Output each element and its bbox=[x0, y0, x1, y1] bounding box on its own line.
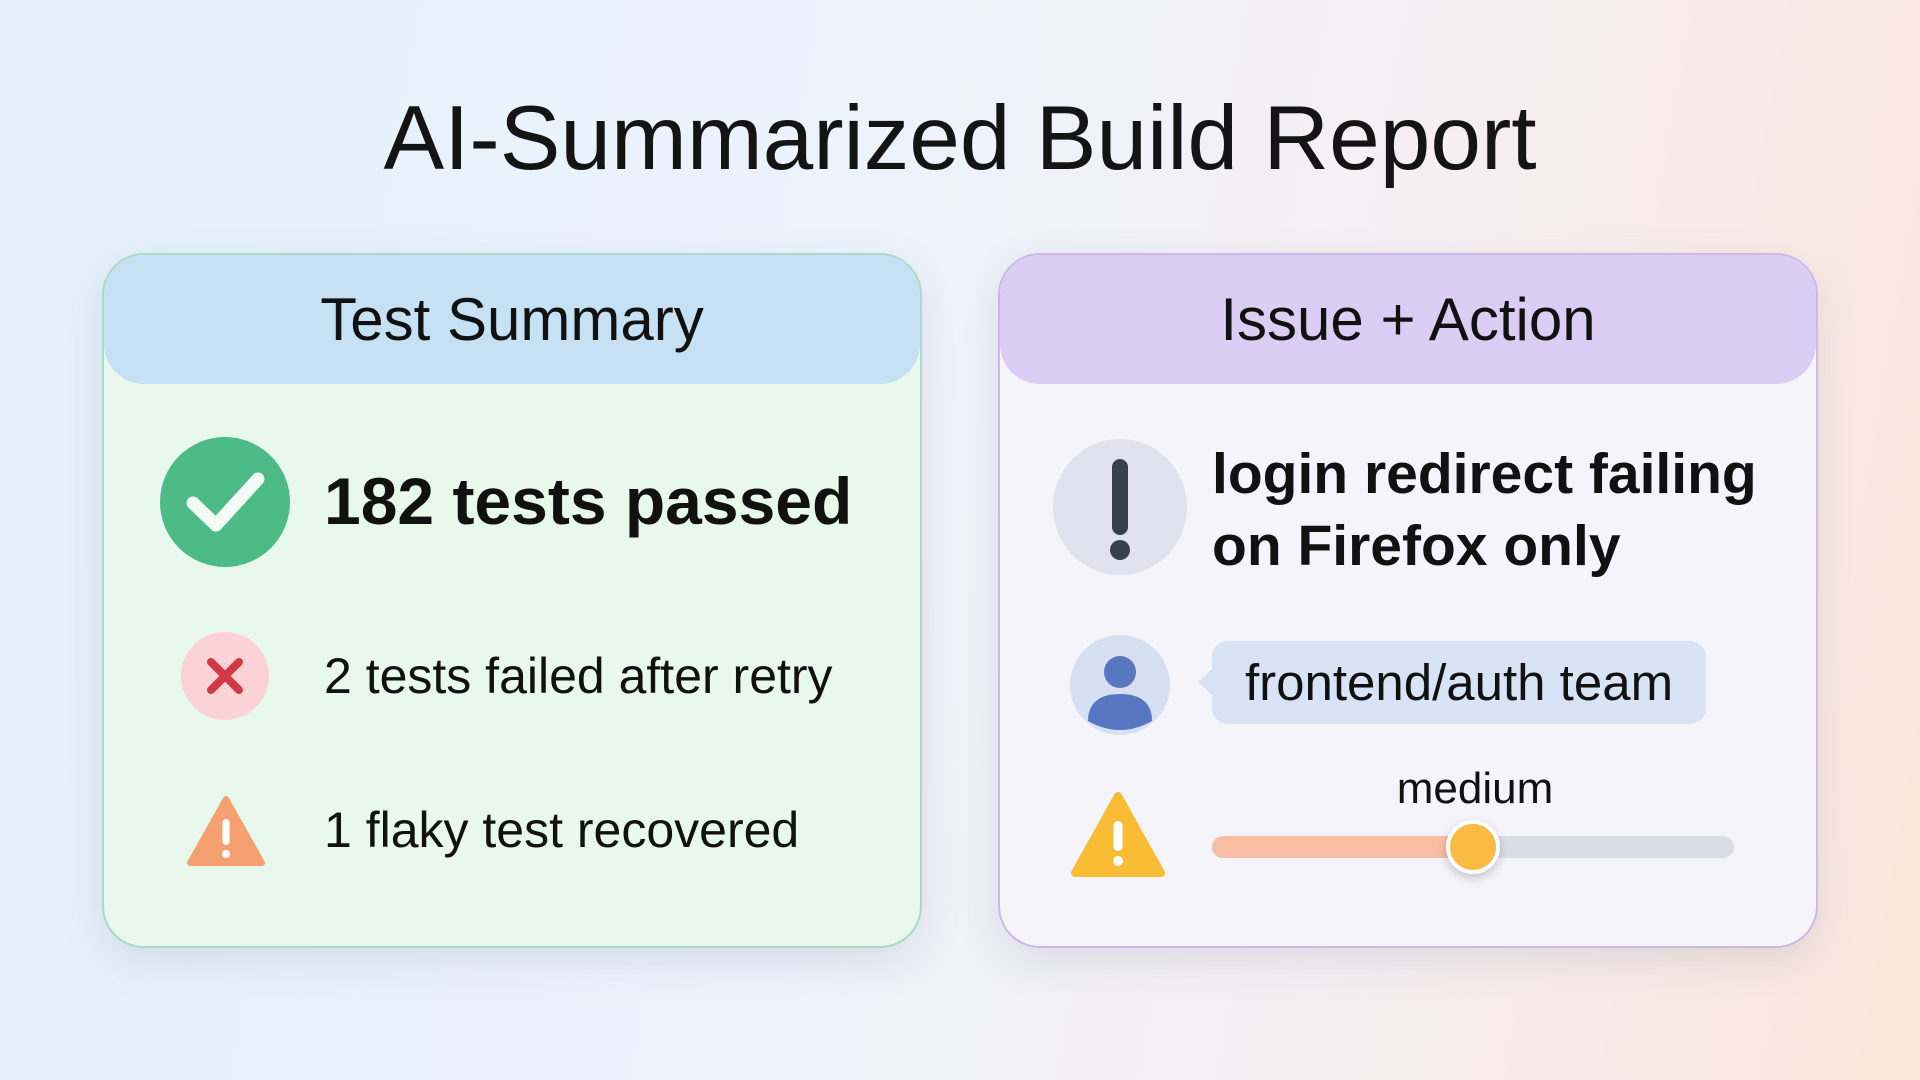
icon: green check bbox=[160, 437, 290, 567]
icon: person bbox=[1070, 635, 1170, 735]
text: flaky: 1 flaky test recovered bbox=[324, 802, 799, 858]
text: medium: medium bbox=[1397, 764, 1553, 813]
text: issue: login redirect failing bbox=[1212, 442, 1757, 506]
header: test summary bbox=[104, 255, 920, 384]
panel: test summary bbox=[102, 253, 922, 948]
panel: issue + action bbox=[998, 253, 1818, 948]
icon: exclamation bbox=[1053, 439, 1187, 575]
icon: red x bbox=[181, 632, 269, 720]
title: AI-Summarized Build Report bbox=[383, 88, 1537, 189]
text: passed: 182 tests passed bbox=[324, 464, 852, 538]
text: issue bbox=[1212, 442, 1757, 578]
icon: yellow warning bbox=[1071, 792, 1165, 877]
text: failed: 2 tests failed after retry bbox=[324, 648, 833, 704]
header: test summary: Test Summary bbox=[320, 286, 704, 353]
callout: team: frontend/auth team bbox=[1245, 654, 1673, 711]
callout: team bbox=[1212, 641, 1706, 724]
header: issue + action bbox=[1000, 255, 1816, 384]
text: issue: on Firefox only bbox=[1212, 514, 1621, 578]
slider: severity bbox=[1212, 820, 1734, 882]
header: issue + action: Issue + Action bbox=[1220, 286, 1596, 353]
icon: orange warning bbox=[187, 796, 265, 866]
